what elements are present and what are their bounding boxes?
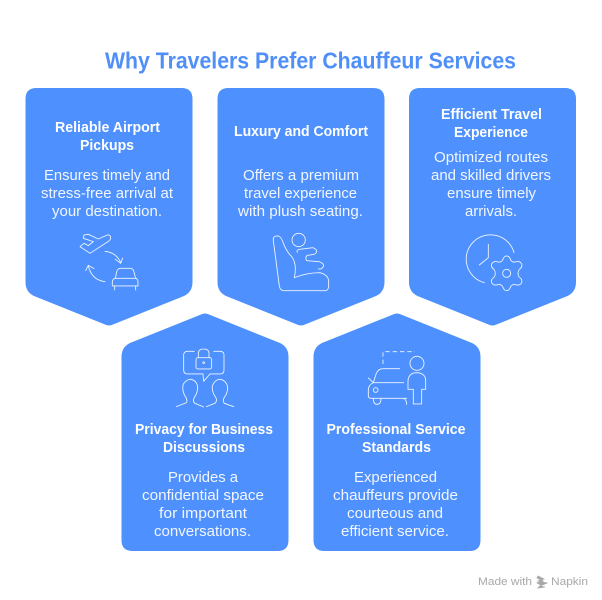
description <box>237 167 363 220</box>
heading: Luxury and Comfort <box>234 124 368 140</box>
heading: Efficient Travel <box>441 107 542 123</box>
description: Offers a premium <box>243 167 359 184</box>
panel: privacy for business discussions <box>122 314 288 551</box>
heading: Standards <box>362 440 431 456</box>
title: Why Travelers Prefer Chauffeur Services <box>105 48 516 74</box>
card shape <box>314 314 480 551</box>
description: travel experience <box>244 185 357 202</box>
heading <box>135 422 273 456</box>
description: for important <box>159 505 248 522</box>
description: Ensures timely and <box>44 167 170 184</box>
footer: made with napkin <box>478 576 588 588</box>
heading <box>441 107 542 141</box>
description: Optimized routes <box>434 149 548 166</box>
heading: Professional Service <box>326 422 466 438</box>
card shape <box>409 88 576 326</box>
heading <box>55 120 160 154</box>
description: courteous and <box>347 505 443 522</box>
icon: napkin logo <box>537 576 547 588</box>
description: confidential space <box>142 487 264 504</box>
description: stress-free arrival at <box>41 185 174 202</box>
heading: Privacy for Business <box>135 422 273 438</box>
description: conversations. <box>154 523 251 540</box>
panel: reliable airport pickups <box>26 88 192 326</box>
description: and skilled drivers <box>431 167 551 184</box>
description: with plush seating. <box>237 203 363 220</box>
footer text: Made with <box>478 576 532 588</box>
panel: professional service standards <box>314 314 480 551</box>
heading: Experience <box>454 125 528 141</box>
description: Experienced <box>354 469 437 486</box>
card shape <box>218 88 384 326</box>
icon: seat <box>273 233 329 291</box>
description: efficient service. <box>341 523 449 540</box>
icon: car and chauffeur <box>368 352 426 404</box>
description: arrivals. <box>465 203 517 220</box>
heading: Discussions <box>163 440 245 456</box>
heading <box>326 422 466 456</box>
card shape <box>122 314 288 551</box>
panel: efficient travel experience <box>409 88 576 326</box>
description <box>333 469 458 540</box>
brand name: Napkin <box>551 576 588 588</box>
description: Provides a <box>168 469 239 486</box>
icon: lock speech bubble and two people <box>176 349 234 407</box>
icon: plane and car <box>80 234 138 290</box>
description <box>431 149 551 220</box>
description: ensure timely <box>447 185 536 202</box>
panel: luxury and comfort <box>218 88 384 326</box>
description: your destination. <box>52 203 162 220</box>
heading: Pickups <box>80 138 134 154</box>
icon: clock and gear <box>466 235 522 291</box>
heading: Reliable Airport <box>55 120 160 136</box>
card shape <box>26 88 192 326</box>
description <box>41 167 174 220</box>
description: chauffeurs provide <box>333 487 458 504</box>
description <box>142 469 264 540</box>
